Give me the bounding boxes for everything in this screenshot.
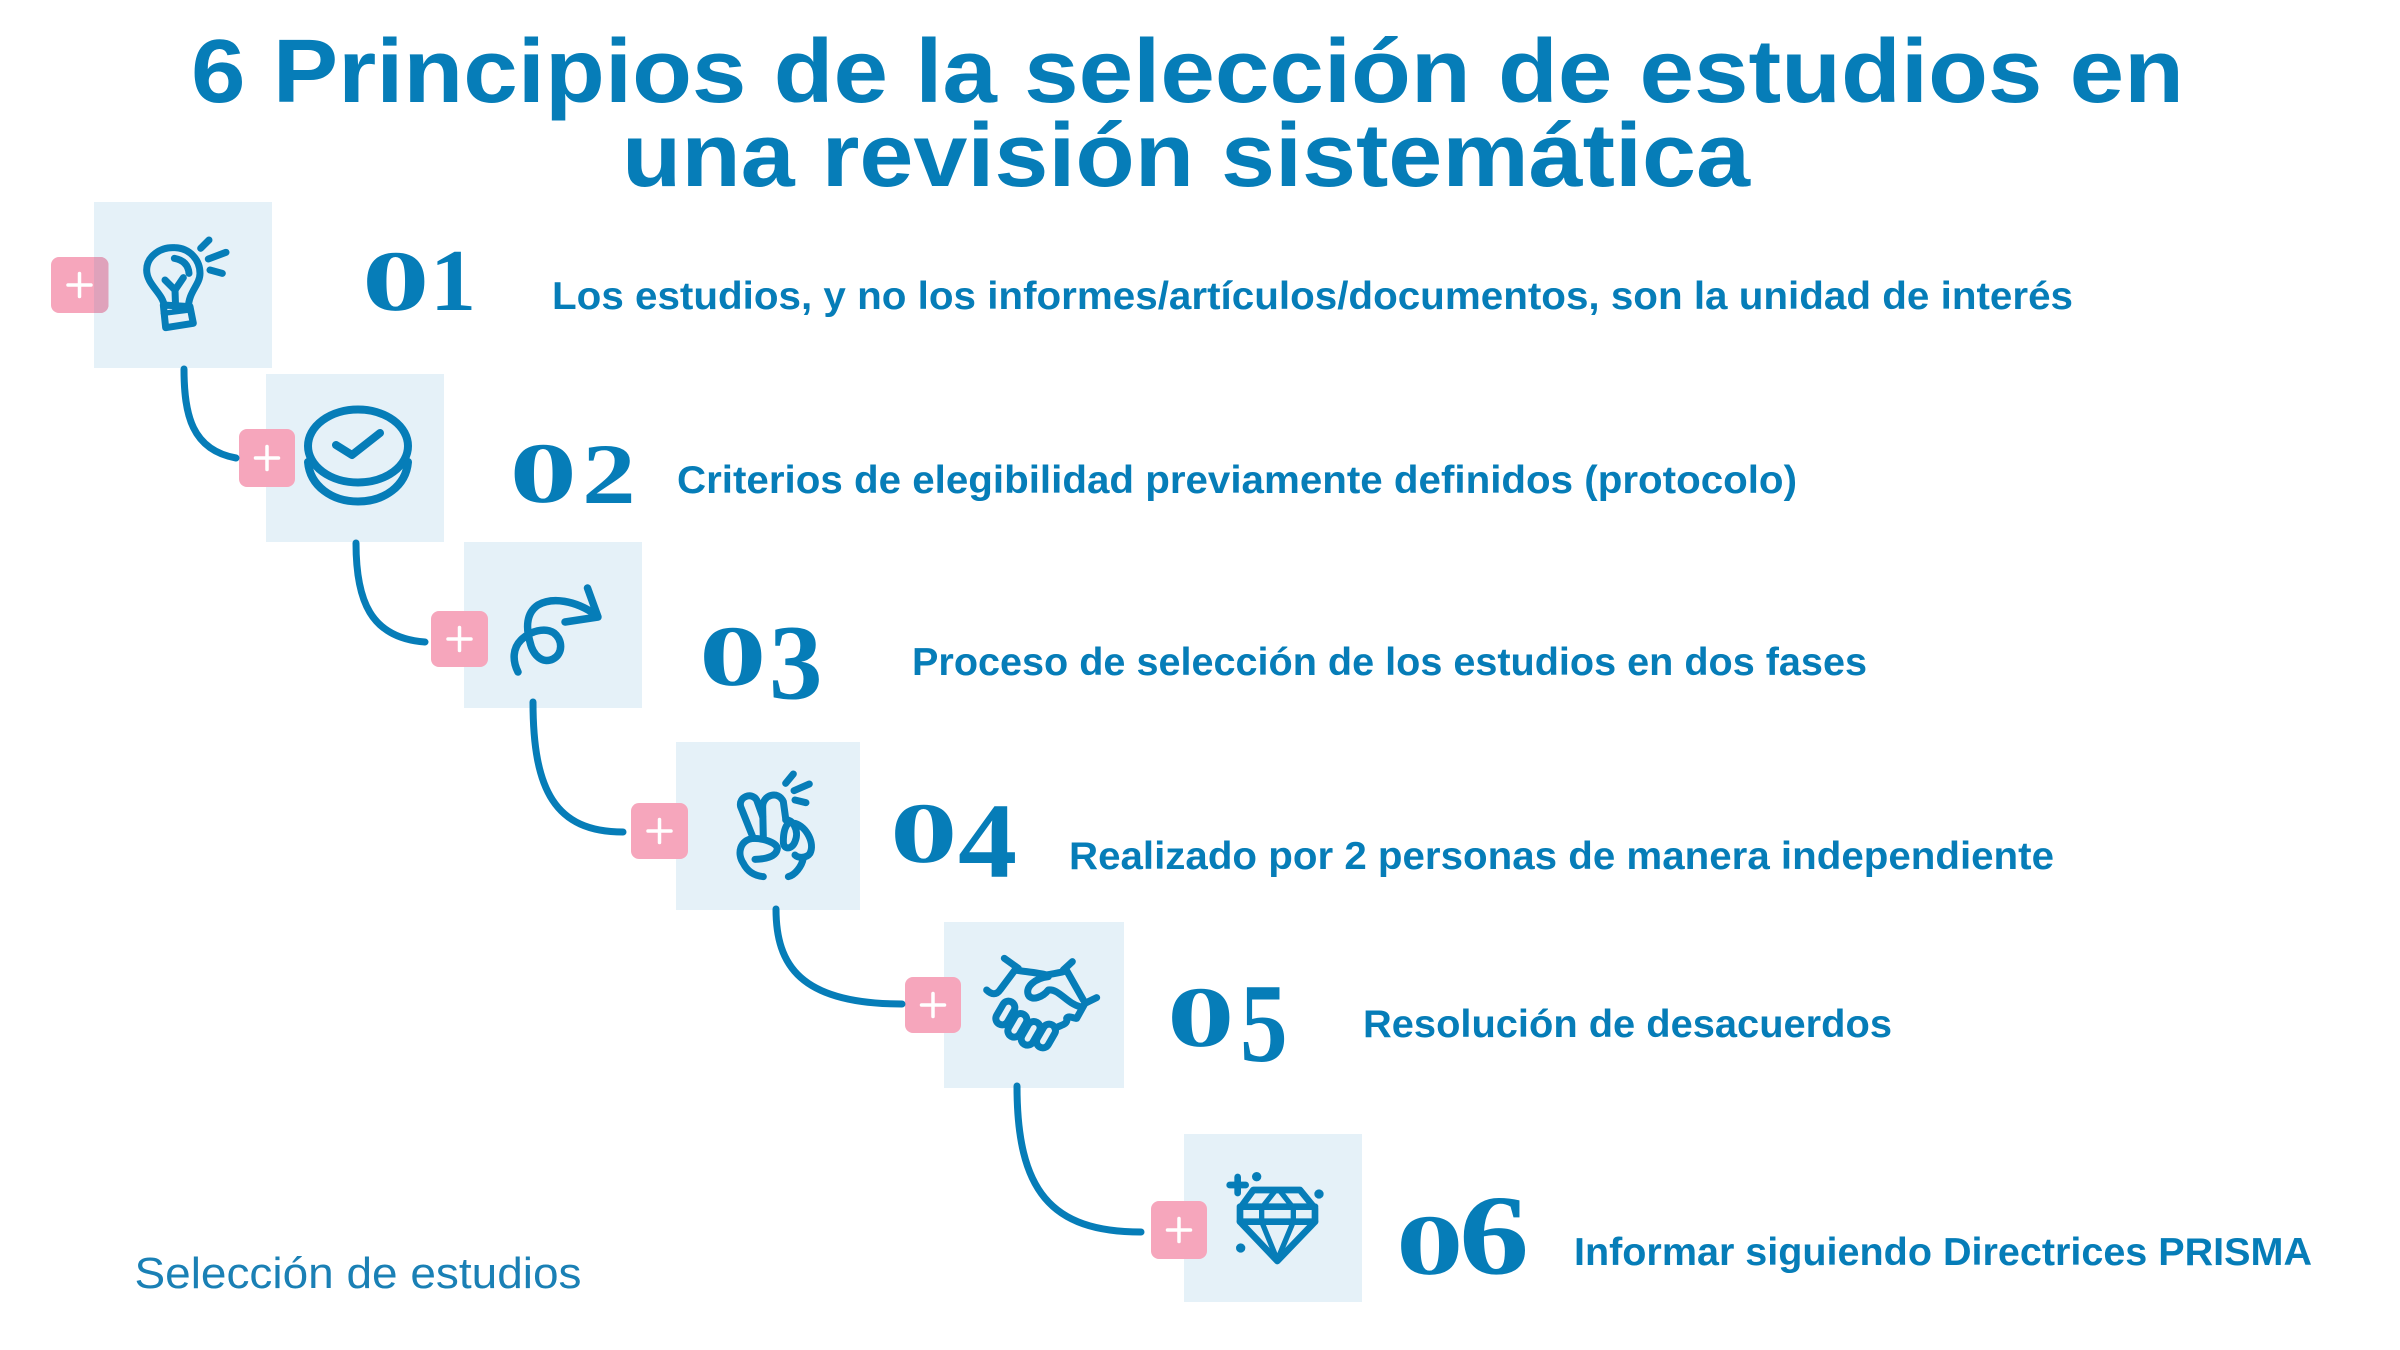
text: principle 6: Informar siguiendo Directrices PRISMA <box>1574 1231 2312 1274</box>
number 02 <box>510 426 636 522</box>
number 05 <box>1167 962 1288 1086</box>
panel: step 1 <box>51 202 2073 368</box>
number 02: 2 <box>582 427 636 522</box>
plus badge 4 <box>631 803 688 859</box>
text: principle 4: Realizado por 2 personas de manera independiente <box>1069 835 2054 878</box>
plus badge 3 <box>431 611 488 667</box>
number 06: 0 <box>1396 1198 1464 1293</box>
icon: handshake <box>987 958 1097 1050</box>
number 05: 0 <box>1167 970 1235 1065</box>
icon: curly arrow <box>514 588 598 672</box>
text: principle 3: Proceso de selección de los estudios en dos fases <box>912 641 1867 684</box>
number 03: 3 <box>769 604 822 722</box>
number 03 <box>699 604 822 722</box>
number 02: 0 <box>510 426 577 521</box>
title <box>191 22 2184 206</box>
footer label: Selección de estudios <box>134 1249 582 1298</box>
text: principle 2: Criterios de elegibilidad previamente definidos (protocolo) <box>677 459 1797 502</box>
number 04: 4 <box>958 782 1017 901</box>
icon: diamond <box>1230 1172 1324 1261</box>
number 04 <box>890 782 1017 901</box>
number 03: 0 <box>699 609 767 704</box>
text: principle 1: Los estudios, y no los informes/artículos/documentos, son la unidad de interés <box>552 275 2073 318</box>
connector arrows between steps <box>184 369 1141 1232</box>
plus badge 6 <box>1151 1201 1207 1259</box>
panel: step 2 <box>239 374 1797 542</box>
number 06 <box>1396 1172 1529 1298</box>
text: principle 5: Resolución de desacuerdos <box>1363 1003 1892 1046</box>
panel: step 5 <box>905 922 1892 1088</box>
title: 6 Principios de la selección de estudios en <box>191 22 2184 122</box>
panel: step 6 <box>1151 1134 2312 1302</box>
number 01: 1 <box>430 232 476 330</box>
number 05: 5 <box>1240 962 1288 1086</box>
icon: peace hand <box>740 774 811 877</box>
plus badge 2 <box>239 429 295 487</box>
plus badge 1 <box>51 257 108 313</box>
icon: coins with check <box>308 410 408 502</box>
panel: step 4 <box>631 742 2054 910</box>
panel: step 3 <box>431 542 1867 722</box>
number 01: 0 <box>362 234 430 329</box>
number 06: 6 <box>1459 1172 1529 1298</box>
number 01 <box>362 232 476 330</box>
plus badge 5 <box>905 977 961 1033</box>
number 04: 0 <box>890 786 958 881</box>
title: una revisión sistemática <box>622 106 1751 206</box>
icon: light bulb <box>147 240 226 328</box>
